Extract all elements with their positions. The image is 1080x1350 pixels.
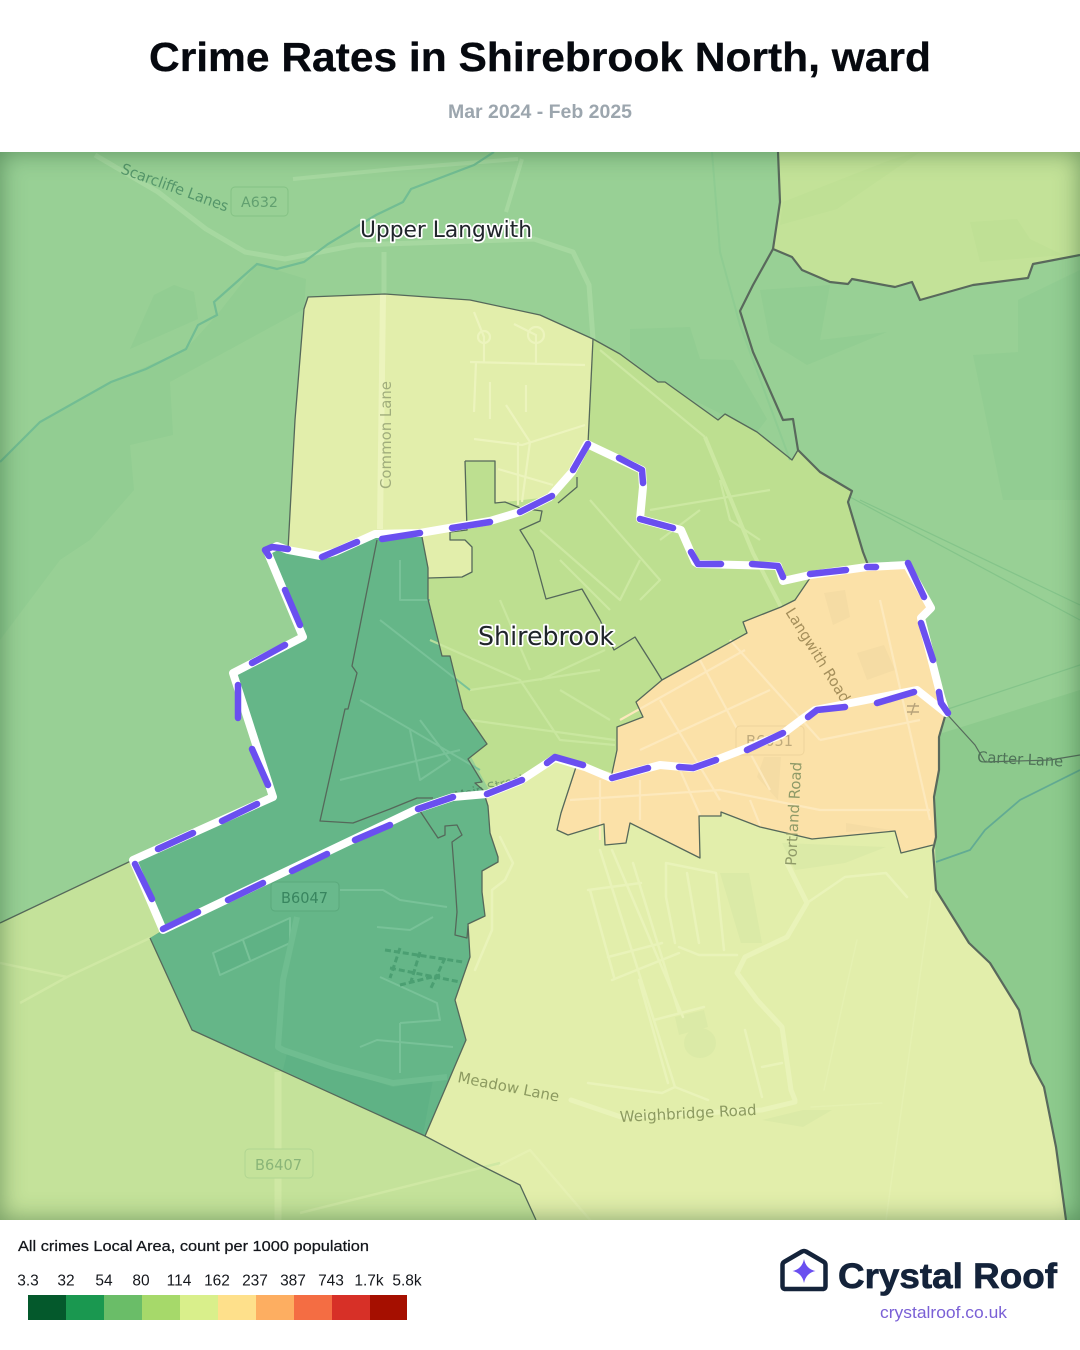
roads: central streets <box>430 350 781 745</box>
legend colour scale <box>28 1295 407 1320</box>
place label: Upper Langwith: Upper Langwith <box>360 218 532 243</box>
legend tick labels: 80 <box>132 1272 150 1290</box>
subtitle: date range: Mar 2024 - Feb 2025 <box>448 102 632 123</box>
heavy boundary outlines <box>740 152 1080 1220</box>
title: Crime Rates in Shirebrook North, ward <box>149 34 931 80</box>
road shield: B6047: B6047 <box>281 889 328 907</box>
pond-like patch <box>684 1028 716 1058</box>
legend tick labels: 387 <box>280 1272 306 1290</box>
legend tick labels: 32 <box>57 1272 75 1290</box>
road labels: Portland Road <box>782 761 805 866</box>
logo: Crystal Roof <box>780 1248 1058 1322</box>
legend tick labels: 162 <box>204 1272 230 1290</box>
roads: northern main roads <box>95 152 790 460</box>
road shield: A632: A632 <box>241 195 278 211</box>
roads: green streets and main roads <box>213 560 480 1083</box>
area: bottom left light green <box>0 860 536 1220</box>
legend tick labels: 743 <box>318 1272 344 1290</box>
icon: railway station <box>907 703 919 715</box>
legend tick labels: 237 <box>242 1272 268 1290</box>
area: orange high crime <box>557 563 946 858</box>
legend <box>17 1238 422 1320</box>
road shield: B6047 <box>271 882 339 911</box>
darker patches in dark green <box>213 918 433 1135</box>
river and rail lines <box>0 152 1080 862</box>
roads: bottom left pale roads <box>0 938 500 1220</box>
area: north yellow <box>288 294 593 578</box>
road shield: A632 <box>231 187 288 216</box>
legend tick labels: 1.7k <box>354 1272 384 1290</box>
area boundary outlines <box>0 294 933 1220</box>
road shield: B6407: B6407 <box>255 1156 302 1174</box>
roads: south yellow streets <box>475 837 932 1220</box>
place label: Shirebrook: Shirebrook <box>478 622 614 652</box>
road labels: Meadow Lane <box>456 1068 561 1106</box>
area: darker land patches <box>0 264 1080 1220</box>
road shield: B6407 <box>245 1149 313 1178</box>
roads: north yellow streets <box>380 294 585 529</box>
road labels: Carter Lane <box>977 748 1064 770</box>
wordmark: Crystal Roof <box>838 1257 1057 1296</box>
road shield: B6051: B6051 <box>746 732 793 750</box>
map edge shadow <box>0 152 1080 1220</box>
road shield: B6051 <box>736 726 804 755</box>
ward boundary: purple dashes <box>135 444 948 929</box>
south yellow darker land patches <box>675 843 886 1127</box>
road labels: Langwith Road <box>782 605 854 706</box>
ward boundary: white outline <box>133 444 946 930</box>
area: central light green <box>420 339 875 810</box>
legend title: All crimes Local Area, count per 1000 population <box>18 1238 369 1255</box>
legend tick labels <box>17 1272 422 1290</box>
road labels: Scarcliffe Lanes <box>119 160 231 215</box>
icon: house with star <box>780 1248 828 1292</box>
roads: orange streets <box>570 600 930 840</box>
legend tick labels: 3.3 <box>17 1272 39 1290</box>
estate of dark streets <box>385 948 463 990</box>
legend tick labels: 54 <box>95 1272 113 1290</box>
road label: Main Street: Main Street <box>453 772 527 805</box>
legend tick labels: 5.8k <box>392 1272 422 1290</box>
area: dark green south west <box>133 535 498 1136</box>
area: top right light green <box>773 152 1080 300</box>
area: base green <box>0 152 1080 1220</box>
area: south yellow <box>425 757 1066 1220</box>
orange darker land patches <box>757 590 895 832</box>
road labels <box>119 160 1064 1126</box>
legend tick labels: 114 <box>167 1272 192 1290</box>
road labels: Weighbridge Road <box>619 1101 757 1126</box>
panel: choropleth map <box>0 152 1080 1220</box>
road labels: Common Lane <box>377 381 395 489</box>
website url: crystalroof.co.uk <box>880 1304 1008 1322</box>
top right darker patches <box>780 152 1063 262</box>
